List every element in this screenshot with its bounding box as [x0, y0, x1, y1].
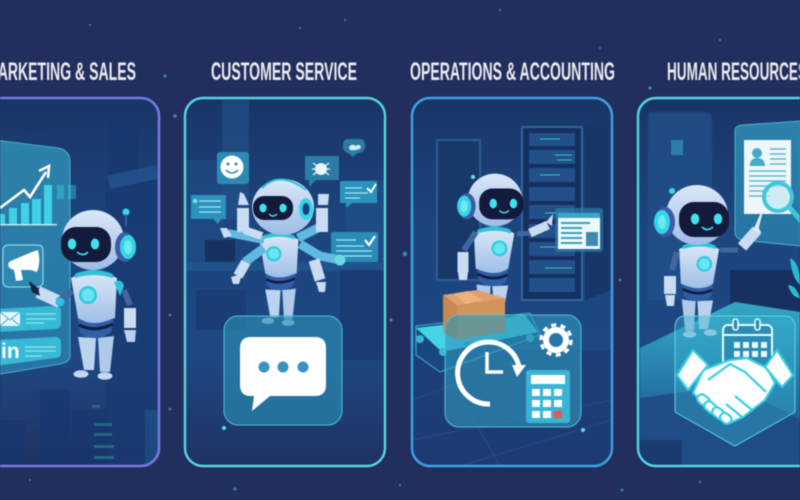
bubble: check lower right: [331, 232, 378, 262]
glass chat card: [224, 316, 342, 425]
panel border: marketing: [0, 98, 159, 466]
icon: growth arrow: [0, 166, 49, 208]
bar chart: [0, 185, 76, 225]
panel border: human resources: [638, 98, 800, 466]
panel: customer service: [185, 98, 385, 466]
icon: chat bubble with dots: [240, 337, 326, 411]
magnifying glass: [764, 183, 800, 222]
bubble: top chat: [343, 139, 365, 157]
cardboard box: [443, 290, 505, 340]
glass marketing board: [0, 140, 76, 375]
icon: clock with arrow: [458, 342, 526, 404]
icon: gear: [541, 325, 571, 355]
robot: operations: [457, 174, 553, 323]
row: linkedin: in: [1, 340, 20, 363]
server rack: [522, 127, 582, 300]
bubble: check top right: [340, 181, 377, 208]
glass hexagon card: [675, 316, 795, 446]
title: operations and accounting: OPERATIONS & ACCOUNTING: [410, 58, 615, 86]
robot: human resources: [654, 185, 762, 338]
bubble: bug: [305, 156, 339, 187]
title: customer service: CUSTOMER SERVICE: [211, 58, 357, 86]
bubble: left chat: [191, 195, 226, 224]
panel: marketing and sales: [0, 98, 159, 466]
icon: calendar: [723, 319, 772, 370]
robot: marketing: [29, 208, 136, 380]
robot: customer service: [220, 179, 346, 326]
resume document: [744, 140, 791, 214]
glass operations card: [445, 315, 581, 427]
panel border: operations: [412, 98, 612, 466]
panel: human resources: [638, 98, 800, 466]
icon: calculator: [526, 370, 570, 423]
icon: megaphone: [3, 245, 43, 287]
panel border: customer service: [185, 98, 385, 466]
row: email: [0, 306, 61, 332]
plant leaves: [788, 258, 800, 298]
conveyor belt: [416, 313, 540, 372]
tablet screen: [555, 208, 603, 252]
bubble: smiley: [217, 152, 249, 184]
icon: handshake: [677, 350, 793, 426]
panel: operations and accounting: [412, 98, 612, 466]
row: linkedin: [0, 337, 61, 366]
glass resume board: [735, 121, 800, 246]
